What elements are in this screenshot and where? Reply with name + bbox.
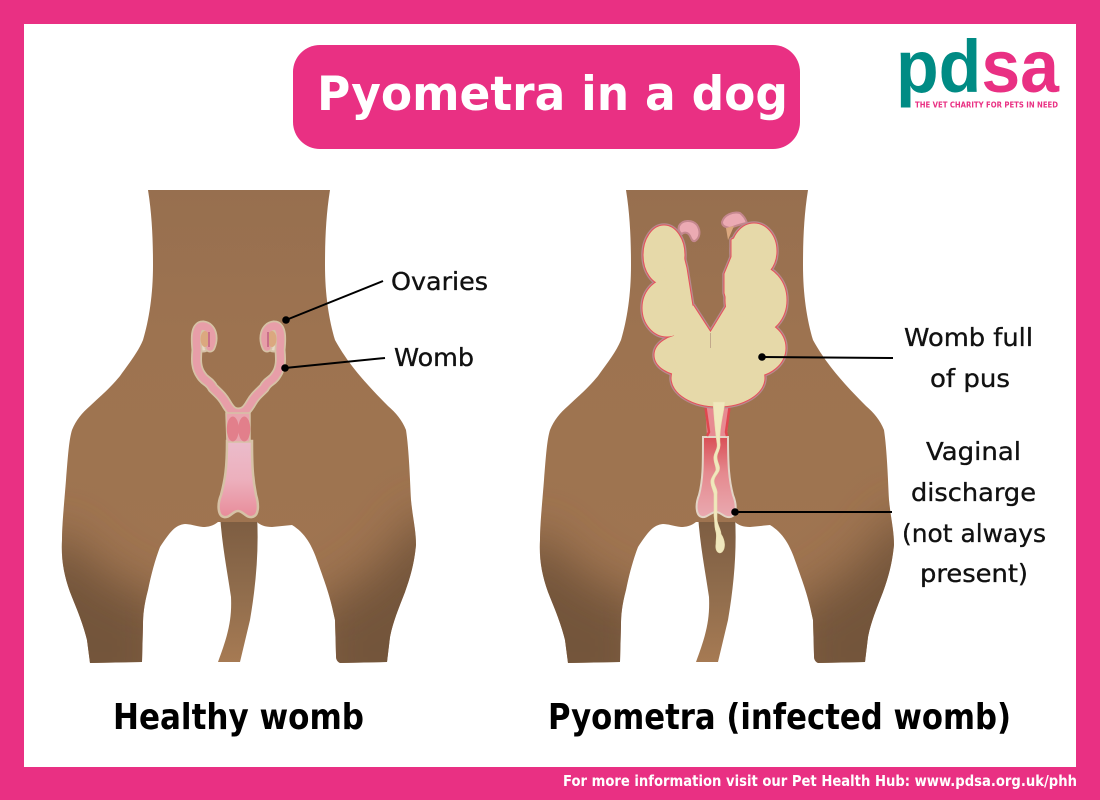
ovary caps: [679, 221, 699, 241]
swollen womb: mauve outer edge: [643, 224, 786, 406]
logo: pdsa: THE VET CHARITY FOR PETS IN NEED: [915, 100, 1058, 110]
ovaries: [200, 331, 210, 347]
pyometra womb anatomy: [643, 212, 786, 553]
callout: vaginal discharge: discharge: [911, 478, 1036, 507]
uterine horns: [192, 322, 284, 413]
title banner: [293, 45, 800, 149]
vagina: [697, 437, 736, 517]
uterine body and cervix: [226, 413, 250, 442]
cervix: [705, 404, 730, 436]
heading: pyometra: Pyometra (infected womb): [548, 697, 1011, 738]
callout: vaginal discharge: [731, 437, 1046, 588]
callout: womb full of pus: [758, 323, 1033, 393]
healthy womb anatomy: [192, 322, 284, 517]
vagina: [219, 441, 258, 517]
logo: pdsa: pdsa: [896, 25, 1060, 108]
callout: vaginal discharge: (not always: [902, 519, 1046, 548]
dog body: healthy: [20, 190, 460, 710]
callout: womb: [281, 343, 474, 372]
swollen womb: red lining: [643, 224, 786, 406]
callout: vaginal discharge: present): [920, 559, 1028, 588]
title banner: Pyometra in a dog: [317, 67, 788, 122]
callout: vaginal discharge: Vaginal: [926, 437, 1021, 466]
callout: ovaries: Ovaries: [391, 267, 488, 296]
dog body: pyometra: [498, 190, 938, 710]
heading: healthy womb: Healthy womb: [113, 697, 364, 738]
callout: womb: Womb: [394, 343, 474, 372]
callout: womb full of pus: of pus: [930, 364, 1010, 393]
callout: womb full of pus: Womb full: [904, 323, 1033, 352]
callout: ovaries: [282, 267, 488, 324]
discharge: [711, 402, 725, 553]
swollen womb: pus: [643, 224, 786, 406]
